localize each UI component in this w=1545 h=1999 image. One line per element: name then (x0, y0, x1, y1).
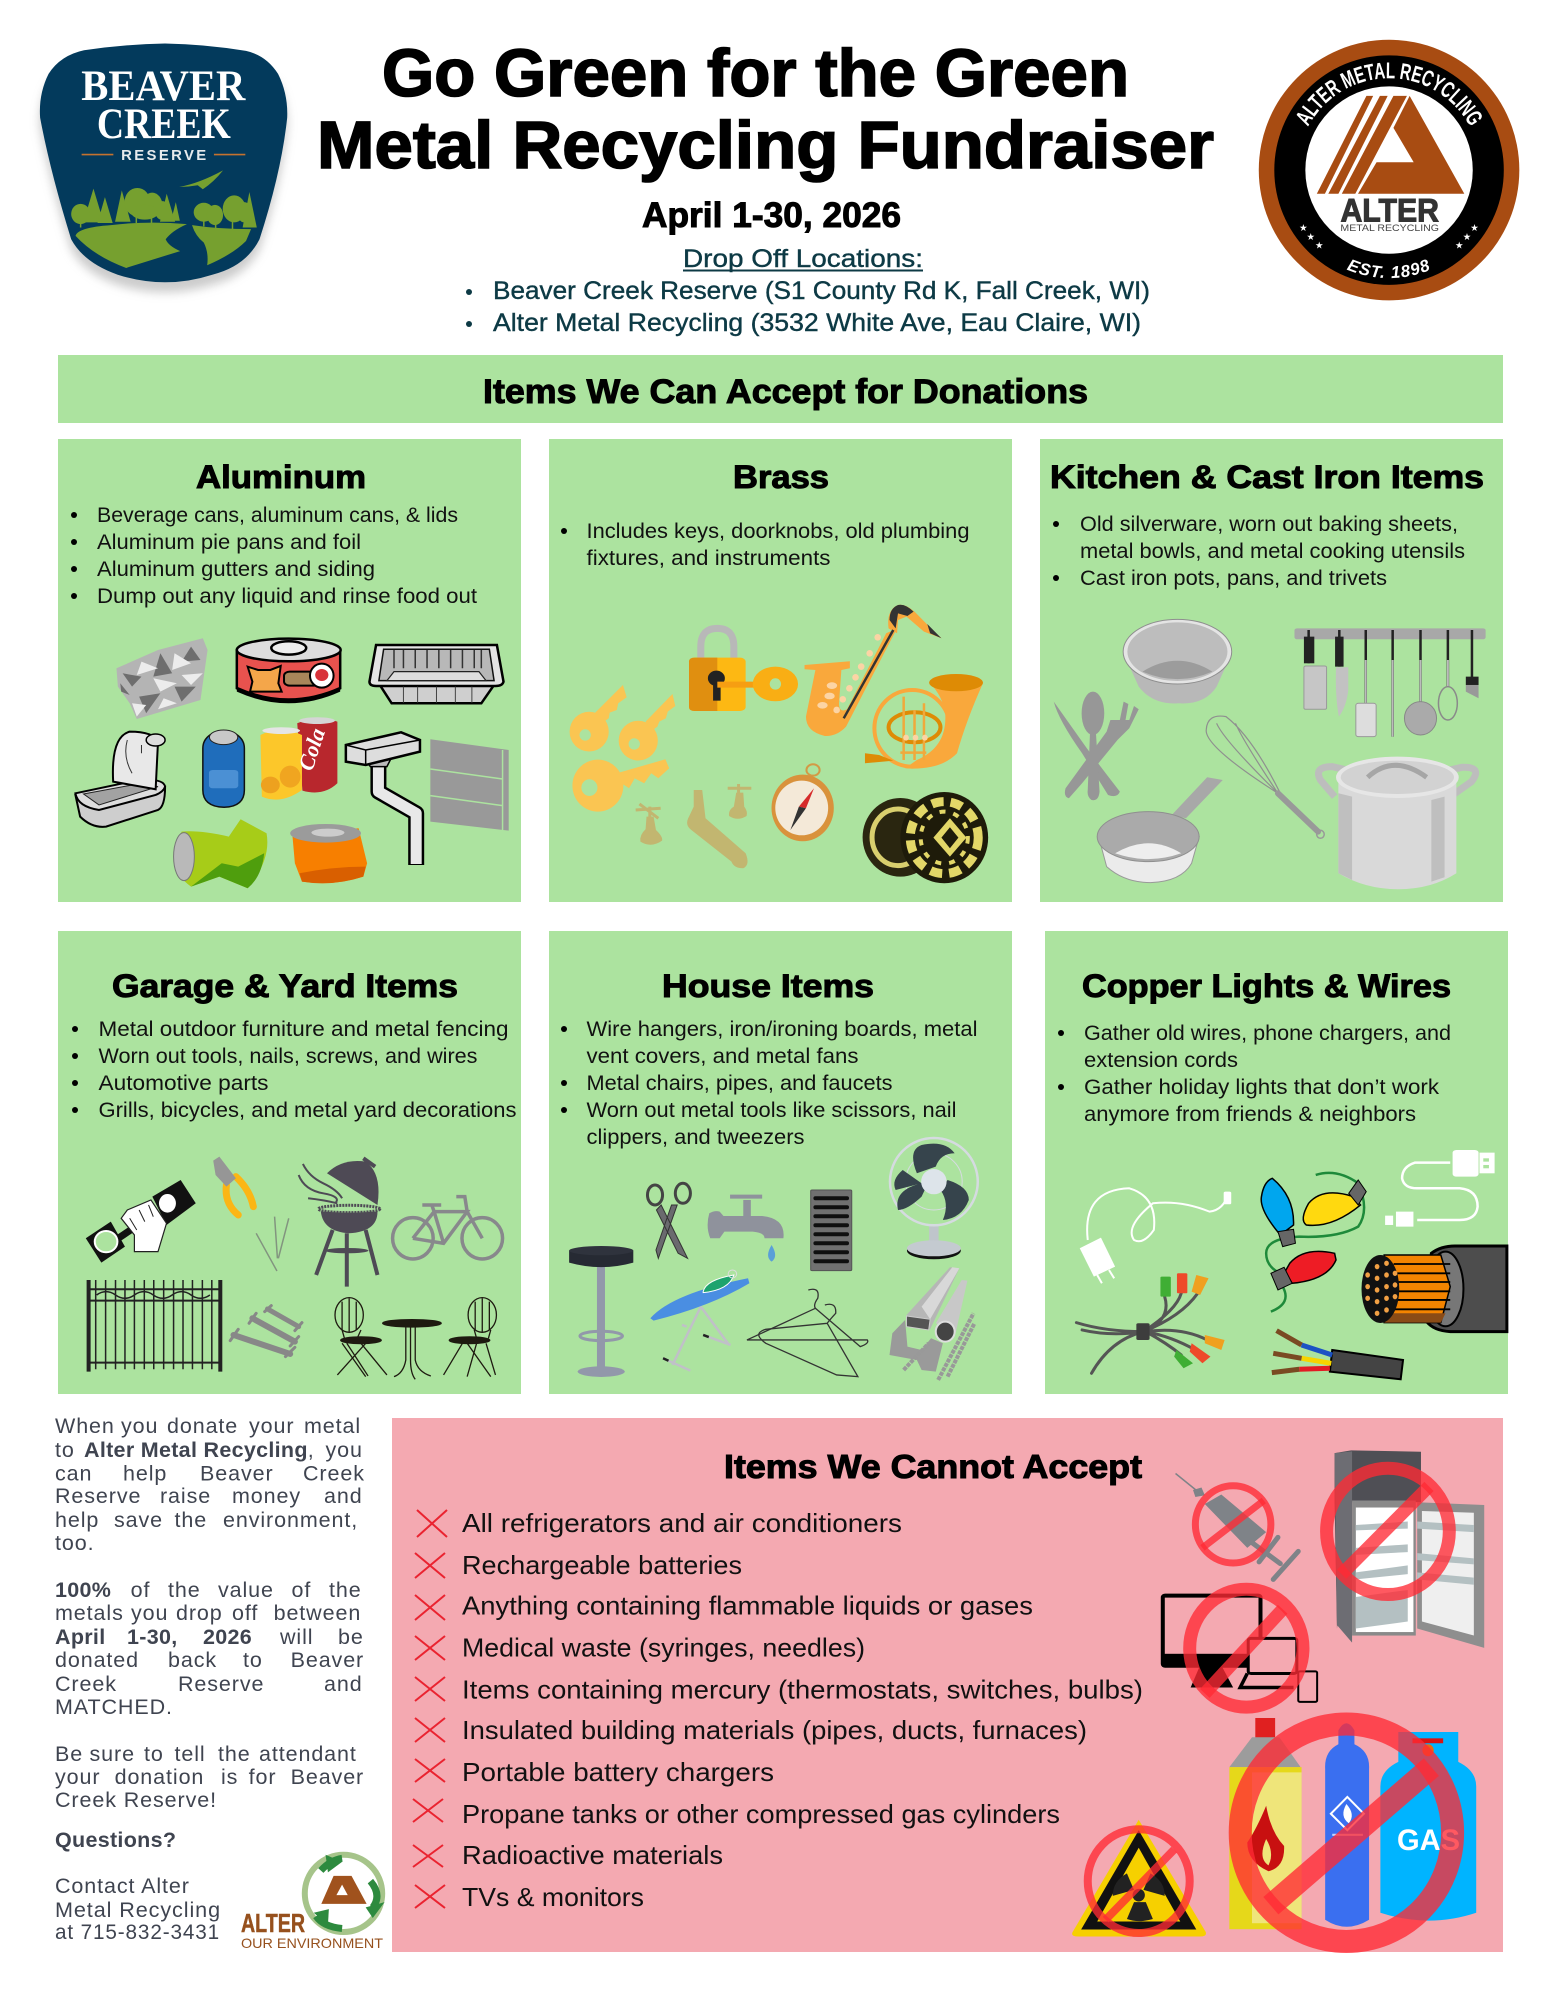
text block: about the fundraiser: raise (160, 1484, 211, 1508)
list: garage (72, 1018, 516, 1122)
drop off locations: Alter Metal Recycling (3532 White Ave, Eau Claire, WI) (493, 309, 1141, 337)
icon: cat food can (237, 639, 341, 703)
text block: about the fundraiser: money (232, 1484, 301, 1508)
icon: pliers (213, 1157, 253, 1215)
text block: about the fundraiser: and (324, 1672, 363, 1696)
logo: Alter Metal Recycling (1258, 40, 1520, 300)
icon: faucet parts (636, 784, 751, 868)
logo: Alter Metal Recycling: ★ (1299, 223, 1308, 234)
text block: about the fundraiser: environment, (223, 1508, 358, 1532)
text block: about the fundraiser: Beaver (291, 1648, 364, 1672)
list: aluminum: Aluminum pie pans and foil (97, 531, 361, 554)
text block: about the fundraiser: help (55, 1508, 99, 1532)
icon: crumpled foil (116, 638, 208, 719)
icon: stripped wire (1272, 1331, 1403, 1379)
text block: about the fundraiser: Alter Metal Recycling (84, 1438, 308, 1462)
text block: about the fundraiser (55, 1414, 365, 1944)
icon: no syringes (1176, 1473, 1298, 1579)
list: cannot accept: Medical waste (syringes, needles) (462, 1632, 865, 1662)
icon: grill (299, 1158, 380, 1287)
text block: about the fundraiser: to (55, 1438, 75, 1462)
icon: scissors (647, 1183, 690, 1258)
list: brass: fixtures, and instruments (586, 547, 830, 570)
text block: about the fundraiser: Metal Recycling (55, 1898, 221, 1922)
label: cola: Cola (293, 725, 330, 774)
list: cannot accept: Radioactive materials (462, 1840, 723, 1870)
logo: Alter Metal Recycling: ★ (1470, 223, 1479, 234)
logo: Alter Metal Recycling: ALTER METAL RECYCLING (1296, 62, 1482, 126)
list: cannot accept: Insulated building materials (pipes, ducts, furnaces) (462, 1715, 1087, 1745)
list: garage: Grills, bicycles, and metal yard decorations (98, 1099, 516, 1122)
text block: about the fundraiser: MATCHED. (55, 1695, 173, 1719)
icon: bicycle (393, 1197, 503, 1259)
list: house: Wire hangers, iron/ironing boards, metal (586, 1018, 978, 1041)
logo: Alter Metal Recycling: ★ (1315, 240, 1323, 251)
icon: prohibition overlay on gas (1240, 1724, 1453, 1941)
list: copper: Gather old wires, phone chargers, and (1084, 1022, 1451, 1045)
logo: Alter Metal Recycling: ★ (1455, 240, 1463, 251)
logo: Alter Metal Recycling: ★ (1307, 232, 1315, 243)
panel: kitchen and cast iron (1040, 439, 1503, 902)
text block: about the fundraiser: save (114, 1508, 163, 1532)
banner: items we can accept (58, 355, 1503, 423)
list: kitchen (1053, 513, 1465, 590)
icon: door knobs (863, 792, 988, 883)
text block: about the fundraiser: sure (90, 1742, 135, 1766)
title: Metal Recycling Fundraiser (317, 108, 1214, 183)
label: gas: GAS (1397, 1824, 1460, 1857)
logo: Alter Metal Recycling: METAL RECYCLING (1340, 223, 1439, 233)
list: garage: Automotive parts (98, 1072, 268, 1095)
icon: crushed orange can (290, 824, 367, 883)
list: house: Metal chairs, pipes, and faucets (586, 1072, 892, 1095)
text block: about the fundraiser: value (218, 1578, 274, 1602)
icon: no radioactive (1072, 1820, 1206, 1937)
text block: about the fundraiser: be (338, 1625, 364, 1649)
text block: about the fundraiser: your (55, 1765, 100, 1789)
list: cannot accept: Anything containing flammable liquids or gases (462, 1590, 1033, 1620)
icon: foil tray (369, 645, 504, 703)
logo: Beaver Creek Reserve (40, 44, 287, 292)
icon: french horn (865, 674, 983, 769)
icon: blue can (203, 730, 244, 807)
list: house: vent covers, and metal fans (586, 1045, 858, 1068)
icon: crushed green can (174, 819, 267, 888)
text block: about the fundraiser: and (324, 1484, 363, 1508)
list: house: clippers, and tweezers (586, 1126, 804, 1149)
list: cannot accept: Items containing mercury (thermostats, switches, bulbs) (462, 1674, 1143, 1704)
icon: stock pot (1319, 757, 1476, 889)
icon: metal bowl (1123, 619, 1232, 703)
text block: about the fundraiser: for (249, 1765, 276, 1789)
text block: about the fundraiser: 2026 (203, 1625, 252, 1649)
icon: metal pipes (890, 1267, 974, 1380)
list: kitchen: Old silverware, worn out baking sheets, (1080, 513, 1458, 536)
list: cannot accept: Portable battery chargers (462, 1757, 774, 1787)
text block: about the fundraiser: back (168, 1648, 217, 1672)
icon: no electronics (1163, 1589, 1317, 1707)
icon: no gas cylinders (1229, 1718, 1476, 1929)
text block: about the fundraiser: help (123, 1462, 167, 1486)
text block: about the fundraiser: metals (55, 1601, 124, 1625)
text block: about the fundraiser: Reserve (55, 1484, 141, 1508)
drop off locations: Beaver Creek Reserve (S1 County Rd K, Fall Creek, WI) (493, 277, 1150, 305)
panel: items we cannot accept (392, 1418, 1503, 1952)
icon: piston in hand (86, 1180, 196, 1263)
text block: about the fundraiser: 1-30, (127, 1625, 178, 1649)
date: April 1-30, 2026 (642, 196, 901, 235)
heading: cannot accept: Items We Cannot Accept (724, 1448, 1142, 1485)
icon: water tap (708, 1197, 784, 1262)
panel: garage and yard (58, 931, 521, 1394)
logo: Alter our environment (241, 1855, 385, 1951)
text block: about the fundraiser: the (329, 1578, 362, 1602)
list: garage: Worn out tools, nails, screws, and wires (98, 1045, 478, 1068)
text block: about the fundraiser: When (55, 1414, 115, 1438)
icon: saxophone (805, 605, 941, 736)
list: cannot accept: Rechargeable batteries (462, 1550, 742, 1580)
drop off locations: Drop Off Locations: (683, 245, 923, 273)
panel: copper lights and wires (1045, 931, 1508, 1394)
icon: padlock and key (689, 628, 798, 711)
icon: ironing board (650, 1270, 749, 1371)
icon: compass (772, 764, 834, 841)
text block: about the fundraiser: to (144, 1742, 164, 1766)
text block: about the fundraiser: donation (115, 1765, 204, 1789)
list: cannot accept (413, 1508, 1143, 1912)
panel: aluminum (58, 439, 521, 902)
icon: floor vent (811, 1190, 852, 1271)
logo: Alter Metal Recycling: EST. 1898 (1346, 260, 1430, 278)
list: aluminum: Dump out any liquid and rinse food out (97, 585, 477, 608)
text block: about the fundraiser: donated (55, 1648, 139, 1672)
icon: wrenches (230, 1306, 302, 1357)
text block: about the fundraiser: Creek (303, 1462, 365, 1486)
text block: about the fundraiser: Beaver (200, 1462, 274, 1486)
text block: about the fundraiser: April (55, 1625, 105, 1649)
text block: about the fundraiser: attendant (259, 1742, 357, 1766)
text block: about the fundraiser: , (308, 1438, 315, 1462)
logo: Beaver Creek Reserve: RESERVE (121, 148, 206, 164)
list: aluminum (71, 504, 477, 608)
text block: about the fundraiser: Beaver (291, 1765, 364, 1789)
icon: cable bundle (1362, 1246, 1507, 1332)
list: garage: Metal outdoor furniture and metal fencing (98, 1018, 509, 1041)
text block: about the fundraiser: between (274, 1601, 361, 1625)
icon: bar stool (569, 1246, 633, 1377)
text block: about the fundraiser: can (55, 1462, 92, 1486)
heading: aluminum: Aluminum (196, 459, 366, 495)
text block: about the fundraiser: is (221, 1765, 238, 1789)
heading: house: House Items (662, 968, 874, 1004)
text block: about the fundraiser: the (174, 1508, 207, 1532)
list: copper: anymore from friends & neighbors (1084, 1103, 1416, 1126)
list: brass: Includes keys, doorknobs, old plumbing (586, 520, 970, 543)
heading: kitchen: Kitchen & Cast Iron Items (1050, 459, 1484, 495)
list: brass (561, 520, 970, 570)
icon: gutter (346, 732, 420, 865)
text block: about the fundraiser: off (232, 1601, 258, 1625)
logo: Alter Metal Recycling: ALTER (1340, 193, 1439, 229)
text block: about the fundraiser: 100% (55, 1578, 111, 1602)
icon: open tin (75, 732, 165, 827)
heading: copper: Copper Lights & Wires (1082, 968, 1451, 1004)
heading: garage: Garage & Yard Items (112, 968, 458, 1004)
text block: about the fundraiser: Reserve (178, 1672, 264, 1696)
icon: wire hangers (747, 1289, 868, 1377)
text block: about the fundraiser: will (279, 1625, 313, 1649)
panel: house items (549, 931, 1012, 1394)
icon: whisk (1206, 716, 1324, 838)
banner: items we can accept: Items We Can Accept for Donations (483, 373, 1088, 411)
title (317, 36, 1214, 183)
text block: about the fundraiser: of (131, 1578, 150, 1602)
list: kitchen: metal bowls, and metal cooking utensils (1080, 540, 1465, 563)
icon: usb cable (1385, 1150, 1495, 1227)
drop off locations (466, 245, 1150, 337)
list: cannot accept: Propane tanks or other compressed gas cylinders (462, 1799, 1060, 1829)
list: kitchen: Cast iron pots, pans, and trivets (1080, 567, 1387, 590)
text block: about the fundraiser: at 715-832-3431 (55, 1920, 220, 1944)
logo: Alter our environment: OUR ENVIRONMENT (241, 1935, 383, 1951)
text block: about the fundraiser: the (168, 1578, 201, 1602)
icon: holiday lights (1261, 1173, 1366, 1312)
icon: saucepan (1097, 777, 1223, 883)
text block: about the fundraiser: Questions? (55, 1828, 176, 1852)
icon: nails (256, 1217, 289, 1271)
list: aluminum: Beverage cans, aluminum cans, & lids (97, 504, 458, 527)
icon: phone charger (1080, 1188, 1231, 1283)
icon: bistro set (335, 1298, 496, 1379)
list: cannot accept: All refrigerators and air conditioners (462, 1508, 902, 1538)
icon: rca cables (1076, 1273, 1225, 1373)
text block: about the fundraiser: you (121, 1414, 158, 1438)
text block: about the fundraiser: Creek Reserve! (55, 1788, 217, 1812)
icon: hanging utensils (1294, 628, 1486, 737)
heading: brass: Brass (733, 459, 829, 495)
text block: about the fundraiser: donate (167, 1414, 238, 1438)
icon: siding (430, 739, 509, 831)
icon: desk fan (890, 1138, 978, 1259)
text block: about the fundraiser: your (249, 1414, 294, 1438)
logo: Alter our environment: ALTER (241, 1908, 305, 1938)
text block: about the fundraiser: Creek (55, 1672, 117, 1696)
logo: Beaver Creek Reserve: CREEK (97, 100, 231, 148)
text block: about the fundraiser: too. (55, 1531, 94, 1555)
logo: Beaver Creek Reserve: BEAVER (81, 62, 247, 110)
logo: Alter Metal Recycling: ★ (1463, 232, 1471, 243)
icon: soda cans (260, 717, 337, 800)
list: copper: Gather holiday lights that don’t work (1084, 1076, 1440, 1099)
text block: about the fundraiser: the (218, 1742, 251, 1766)
text block: about the fundraiser: you (131, 1601, 168, 1625)
text block: about the fundraiser: tell (174, 1742, 206, 1766)
text block: about the fundraiser: you (326, 1438, 363, 1462)
icon: cutlery (1054, 692, 1139, 800)
list: copper (1058, 1022, 1451, 1126)
icon: no refrigerators (1327, 1450, 1484, 1648)
list: house (561, 1018, 978, 1149)
list: copper: extension cords (1084, 1049, 1238, 1072)
list: house: Worn out metal tools like scissors, nail (586, 1099, 956, 1122)
text block: about the fundraiser: to (243, 1648, 263, 1672)
text block: about the fundraiser: of (292, 1578, 311, 1602)
text block: about the fundraiser: drop (176, 1601, 223, 1625)
list: aluminum: Aluminum gutters and siding (97, 558, 375, 581)
list: cannot accept: TVs & monitors (462, 1882, 644, 1912)
text block: about the fundraiser: Be (55, 1742, 83, 1766)
panel: brass (549, 439, 1012, 902)
text block: about the fundraiser: metal (304, 1414, 361, 1438)
title: Go Green for the Green (382, 36, 1129, 111)
text block: about the fundraiser: Contact Alter (55, 1874, 190, 1898)
icon: keys (570, 685, 675, 812)
icon: iron fence (89, 1280, 220, 1372)
